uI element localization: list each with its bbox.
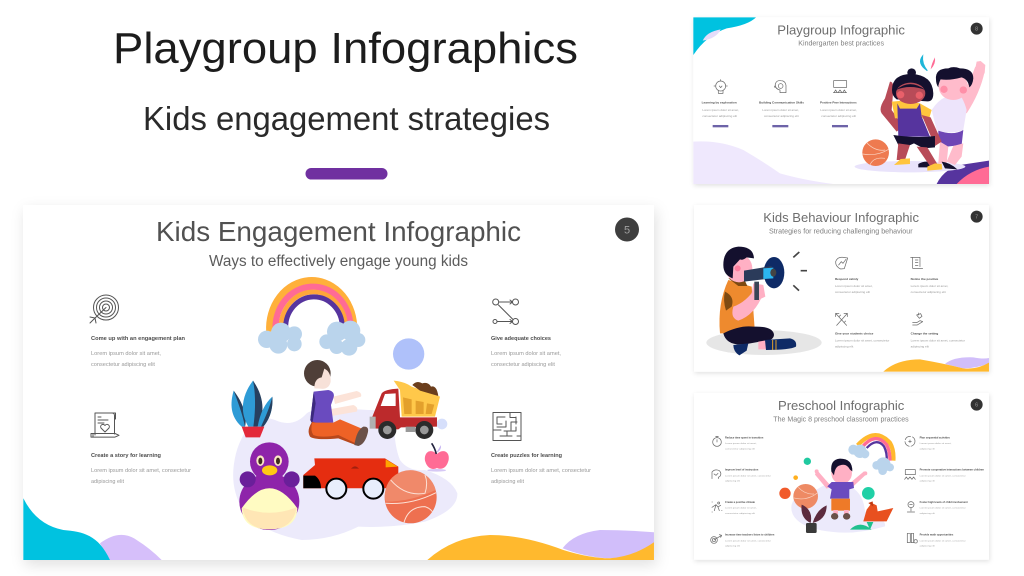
item: change the setting bbox=[911, 313, 965, 349]
right column items: adipiscing elit bbox=[920, 545, 935, 548]
left column items: adipiscing elit bbox=[725, 545, 740, 548]
page number badge: 5 bbox=[624, 224, 630, 236]
icon: hands and head bbox=[712, 470, 721, 479]
item: puzzles for learning: adipiscing elit bbox=[491, 479, 524, 485]
red car bbox=[303, 458, 398, 499]
torso bbox=[719, 280, 755, 333]
clouds bbox=[258, 321, 365, 356]
right column items: Lorem ipsum dolor sit amet, consectetur bbox=[920, 507, 966, 510]
item: puzzles for learning bbox=[491, 412, 591, 485]
item: engagement plan: Come up with an engagement plan bbox=[91, 336, 185, 342]
right column items: adipiscing elit bbox=[920, 447, 935, 450]
item: respond calmly: consectetur adipiscing elit bbox=[835, 290, 870, 294]
plant bbox=[801, 505, 827, 533]
clouds bbox=[848, 445, 894, 475]
left column items: adipiscing elit bbox=[725, 480, 740, 483]
item: notice the positive: Lorem ipsum dolor sit amet, bbox=[911, 284, 949, 288]
dog bbox=[863, 501, 893, 521]
panel: behaviour slide bbox=[694, 205, 989, 372]
small pale circle bbox=[437, 419, 447, 429]
item: story for learning bbox=[91, 413, 191, 485]
icon: presentation board bbox=[833, 81, 847, 93]
icon: lamp head bbox=[907, 502, 915, 512]
item: adequate choices: Lorem ipsum dolor sit amet, bbox=[491, 351, 561, 357]
left column items: Lorem ipsum dolor sit amet, consectetur bbox=[725, 474, 771, 477]
panel: playgroup slide bbox=[693, 17, 989, 184]
sound lines bbox=[793, 252, 807, 291]
megaphone bbox=[764, 257, 784, 288]
item: adequate choices: consectetur adipiscing elit bbox=[491, 362, 555, 368]
apple bbox=[425, 443, 449, 472]
item: story for learning: Lorem ipsum dolor sit amet, consectetur bbox=[91, 468, 191, 474]
heading: kids engagement: Kids Engagement Infographic bbox=[156, 216, 521, 247]
subheading: kindergarten: Kindergarten best practices bbox=[798, 41, 884, 48]
icon: maze bbox=[493, 412, 521, 440]
icon: head profile bbox=[774, 81, 786, 93]
left column items: Reduce time spent in transition bbox=[725, 436, 764, 439]
girl bbox=[881, 68, 942, 171]
page number badge bbox=[971, 211, 983, 223]
icon: ruler and blocks bbox=[907, 533, 917, 543]
child bbox=[815, 459, 867, 520]
child bbox=[304, 360, 368, 446]
icon: target with arrow bbox=[90, 295, 118, 323]
item: engagement plan: consectetur adipiscing elit bbox=[91, 362, 155, 368]
heading: playgroup: Playgroup Infographic bbox=[777, 22, 905, 37]
panel: kids engagement slide bbox=[23, 205, 654, 560]
right column items: Lorem ipsum dolor sit amet, bbox=[920, 442, 952, 445]
right column items: Provide math opportunities bbox=[920, 534, 954, 537]
legs bbox=[723, 326, 774, 344]
left column items bbox=[711, 436, 775, 548]
left column items: Lorem ipsum dolor sit amet, consectetur bbox=[725, 539, 771, 542]
panel: preschool slide bbox=[694, 393, 989, 560]
left column items: consectetur adipiscing elit bbox=[725, 447, 755, 450]
icon: sequential circle bbox=[905, 436, 915, 446]
illustration: boy with megaphone bbox=[706, 247, 822, 355]
page number badge bbox=[971, 399, 983, 411]
blue circle bbox=[393, 338, 424, 370]
icon: crossed arrows bbox=[836, 313, 847, 325]
ball bbox=[862, 139, 889, 166]
item: give students choice: Give your students choice bbox=[835, 331, 874, 335]
item: notice the positive: Notice the positive bbox=[911, 277, 939, 281]
item: give students choice bbox=[835, 313, 889, 349]
right column items bbox=[905, 436, 984, 548]
icon: light bulb bbox=[714, 80, 727, 93]
icon: target arrow bbox=[711, 535, 722, 543]
ball bbox=[793, 484, 818, 509]
item: respond calmly: Respond calmly bbox=[835, 277, 859, 281]
icon: branching choices bbox=[493, 299, 518, 324]
right column items: Foster high levels of child involvement bbox=[920, 501, 968, 504]
subheading: magic 8: The Magic 8 preschool classroom practices bbox=[773, 417, 909, 424]
item: engagement plan: Lorem ipsum dolor sit amet, bbox=[91, 351, 161, 357]
icon: running figure with stars bbox=[712, 502, 722, 512]
right column items: Lorem ipsum dolor sit amet, consectetur bbox=[920, 474, 966, 477]
page number badge bbox=[615, 218, 639, 242]
illustration: child with dog and toys bbox=[779, 435, 894, 533]
icon: checklist scroll bbox=[911, 257, 923, 268]
dump truck bbox=[370, 381, 440, 439]
page number badge bbox=[971, 23, 983, 35]
item: give students choice: Lorem ipsum dolor sit amet, consectetur bbox=[835, 339, 889, 343]
accent bar bbox=[306, 168, 388, 180]
right column items: Promote cooperative interactions between children bbox=[920, 468, 984, 471]
item: puzzles for learning: Lorem ipsum dolor sit amet, consectetur bbox=[491, 468, 591, 474]
item: engagement plan bbox=[90, 295, 185, 368]
item: positive peer interactions bbox=[820, 81, 857, 127]
item: adequate choices: Give adequate choices bbox=[491, 336, 551, 342]
heading: behaviour: Kids Behaviour Infographic bbox=[763, 211, 919, 225]
right column items: adipiscing elit bbox=[920, 512, 935, 515]
item: give students choice: adipiscing elit bbox=[835, 345, 854, 349]
cheer marks bbox=[920, 56, 935, 71]
icon: head with chart bbox=[836, 257, 848, 269]
item: learning by exploration: Lorem ipsum dolor sit amet, bbox=[702, 108, 739, 112]
subheading: strategies: Strategies for reducing challenging behaviour bbox=[769, 228, 913, 235]
item: puzzles for learning: Create puzzles for learning bbox=[491, 453, 562, 459]
plant bbox=[232, 381, 272, 437]
item: respond calmly bbox=[835, 257, 873, 294]
lilac blob bbox=[791, 483, 885, 533]
corner shape top left bbox=[693, 17, 756, 55]
lilac background blob bbox=[233, 409, 457, 540]
item: notice the positive: consectetur adipiscing elit bbox=[911, 290, 946, 294]
left column items: Create a positive climate bbox=[725, 501, 756, 504]
item: positive peer interactions: consectetur adipiscing elit bbox=[821, 114, 856, 118]
green leaves bbox=[850, 522, 873, 530]
page number badge: 7 bbox=[975, 215, 978, 221]
item: adequate choices bbox=[491, 299, 561, 368]
decorative waves bottom left bbox=[23, 498, 162, 560]
illustration: child with toys bbox=[232, 281, 457, 540]
head bbox=[726, 254, 752, 282]
item: change the setting: Change the setting bbox=[911, 331, 939, 335]
right column items: Plan sequential activities bbox=[920, 436, 951, 439]
left column items: Increase time teachers listen to children bbox=[725, 534, 775, 537]
subheading: ways to engage: Ways to effectively engage young kids bbox=[209, 253, 468, 270]
subtitle: Kids engagement strategies bbox=[143, 100, 550, 137]
icon: presentation group bbox=[905, 470, 915, 479]
rainbow bbox=[858, 435, 893, 461]
wave bottom left bbox=[693, 141, 833, 184]
right column items: adipiscing elit bbox=[920, 480, 935, 483]
heading: preschool: Preschool Infographic bbox=[778, 399, 904, 413]
wave bottom right bbox=[883, 357, 989, 372]
boy bbox=[918, 61, 985, 169]
duck toy bbox=[239, 442, 300, 530]
title: Playgroup Infographics bbox=[113, 24, 578, 73]
item: notice the positive bbox=[911, 257, 949, 294]
left column items: Lorem ipsum dolor sit amet, bbox=[725, 442, 757, 445]
item: change the setting: adipiscing elit bbox=[911, 345, 929, 349]
left column items: consectetur adipiscing elit bbox=[725, 512, 755, 515]
icon: hand with plant bbox=[913, 313, 923, 325]
decorative waves bottom right bbox=[427, 530, 654, 560]
basketball bbox=[385, 470, 437, 523]
wave bottom right bbox=[937, 161, 989, 184]
item: respond calmly: Lorem ipsum dolor sit amet, bbox=[835, 284, 873, 288]
item: positive peer interactions: Lorem ipsum dolor sit amet, bbox=[820, 108, 857, 112]
item: change the setting: Lorem ipsum dolor sit amet, consectetur bbox=[911, 339, 965, 343]
item: building communication skills: consectetur adipiscing elit bbox=[764, 114, 799, 118]
item: learning by exploration: consectetur adipiscing elit bbox=[702, 114, 737, 118]
arm bbox=[732, 288, 763, 321]
left column items: Lorem ipsum dolor sit amet, bbox=[725, 507, 757, 510]
item: building communication skills: Building Communication Skills bbox=[759, 101, 804, 105]
item: learning by exploration bbox=[702, 80, 739, 127]
item: learning by exploration: Learning by exploration bbox=[702, 101, 737, 105]
left column items: Improve level of instruction bbox=[725, 468, 759, 471]
item: building communication skills: Lorem ipsum dolor sit amet, bbox=[762, 108, 799, 112]
icon: stopwatch bbox=[713, 436, 721, 446]
page number badge: 8 bbox=[975, 27, 978, 33]
item: story for learning: adipiscing elit bbox=[91, 479, 124, 485]
colored dots bbox=[779, 458, 875, 500]
rainbow bbox=[270, 281, 354, 332]
page number badge: 6 bbox=[975, 403, 978, 409]
item: building communication skills bbox=[759, 81, 804, 127]
item: positive peer interactions: Positive Peer Interactions bbox=[820, 101, 857, 105]
icon: scroll and pencil bbox=[91, 413, 119, 437]
item: story for learning: Create a story for learning bbox=[91, 453, 161, 459]
illustration: two children with ball bbox=[855, 56, 985, 172]
right column items: Lorem ipsum dolor sit amet, consectetur bbox=[920, 539, 966, 542]
